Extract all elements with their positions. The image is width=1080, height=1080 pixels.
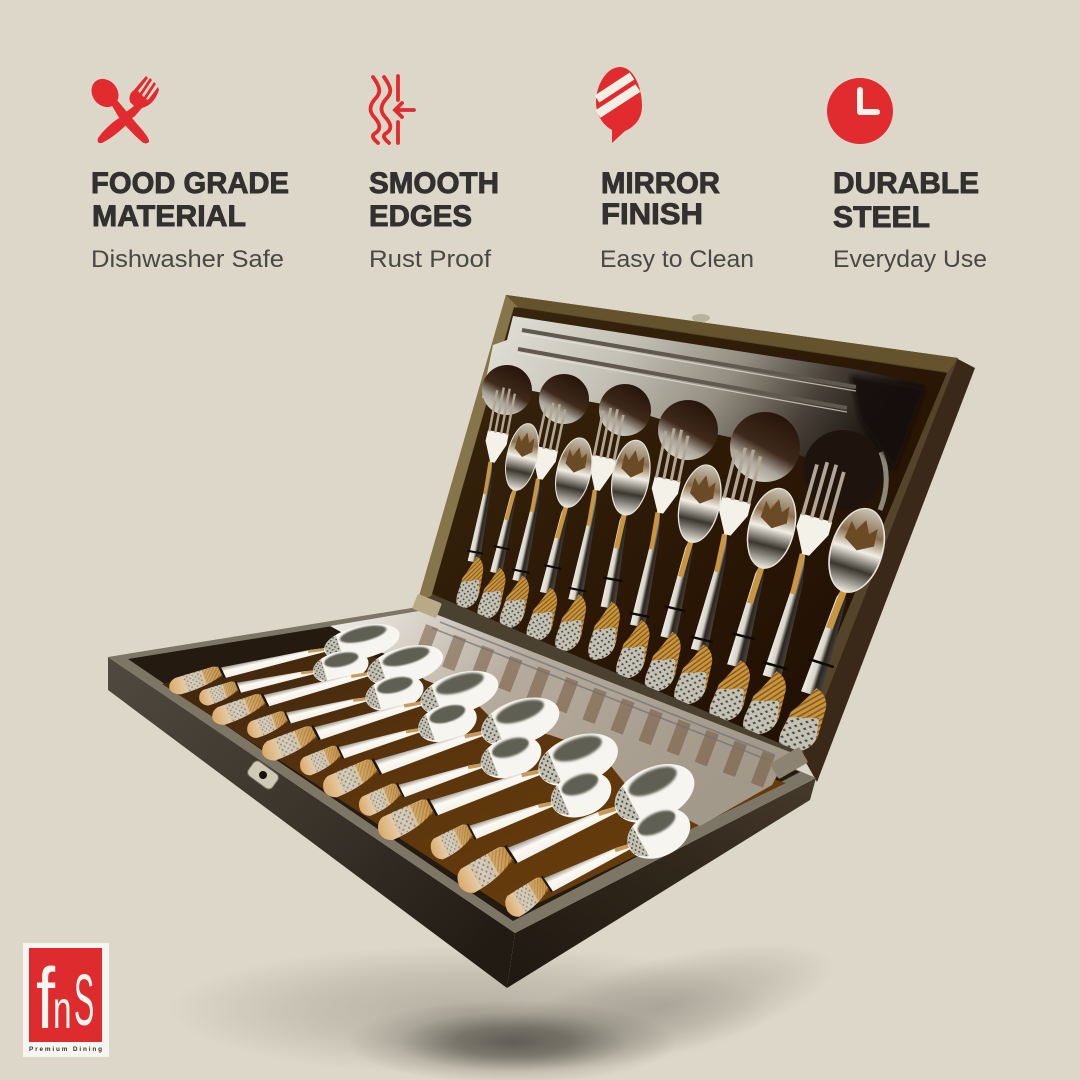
feature 4: durable steel [827, 78, 987, 273]
base interior wall [128, 612, 800, 921]
feature 3: mirror finish [596, 67, 754, 273]
subtext: Everyday Use [833, 246, 987, 273]
heading [601, 167, 720, 231]
open lid of cutlery box [418, 295, 975, 782]
hinge strip [424, 594, 800, 772]
left front face [108, 657, 515, 988]
subtext: Dishwasher Safe [91, 246, 284, 273]
heading: SMOOTH [369, 167, 499, 200]
box base [108, 594, 816, 988]
icon: shiny spoon bowl [596, 67, 642, 143]
spoons in lid [471, 421, 894, 760]
velvet floor [162, 648, 786, 914]
subtext: Rust Proof [369, 246, 491, 273]
top rim [108, 607, 816, 933]
heading [91, 167, 289, 233]
heading: EDGES [369, 200, 472, 233]
subtext: Easy to Clean [600, 246, 754, 273]
lid interior [432, 307, 947, 748]
feature 2: smooth edges [369, 76, 499, 273]
lid side face [800, 358, 975, 782]
heading [369, 167, 499, 233]
icon: wavy edges with arrow [370, 76, 414, 143]
logo: FnS Premium Dining [23, 943, 109, 1057]
logo: FnS Premium Dining: S [74, 960, 94, 1041]
forks in lid [454, 386, 849, 741]
lid latch [692, 314, 710, 322]
heading: STEEL [833, 201, 930, 234]
heading: DURABLE [833, 167, 979, 200]
feature 1: food grade material [86, 73, 289, 273]
clear moulded tray [330, 610, 790, 826]
icon: crossed spoon and fork [86, 73, 159, 144]
heading [833, 167, 979, 234]
moulded tray [482, 316, 925, 510]
hinges [412, 594, 808, 779]
icon: clock [827, 78, 893, 144]
heading: FINISH [601, 198, 703, 231]
logo: FnS Premium Dining: f [36, 951, 55, 1047]
heading: MIRROR [601, 167, 720, 200]
heading: FOOD GRADE [91, 167, 289, 200]
front lock [246, 759, 280, 791]
heading: MATERIAL [92, 200, 246, 233]
logo: FnS Premium Dining: Premium Dining [29, 1046, 102, 1053]
lid rim [418, 295, 958, 756]
floor shadow [170, 917, 846, 1080]
right front face [507, 778, 816, 988]
dessert spoons and forks lying in base [165, 617, 704, 929]
logo: FnS Premium Dining: n [53, 979, 72, 1040]
